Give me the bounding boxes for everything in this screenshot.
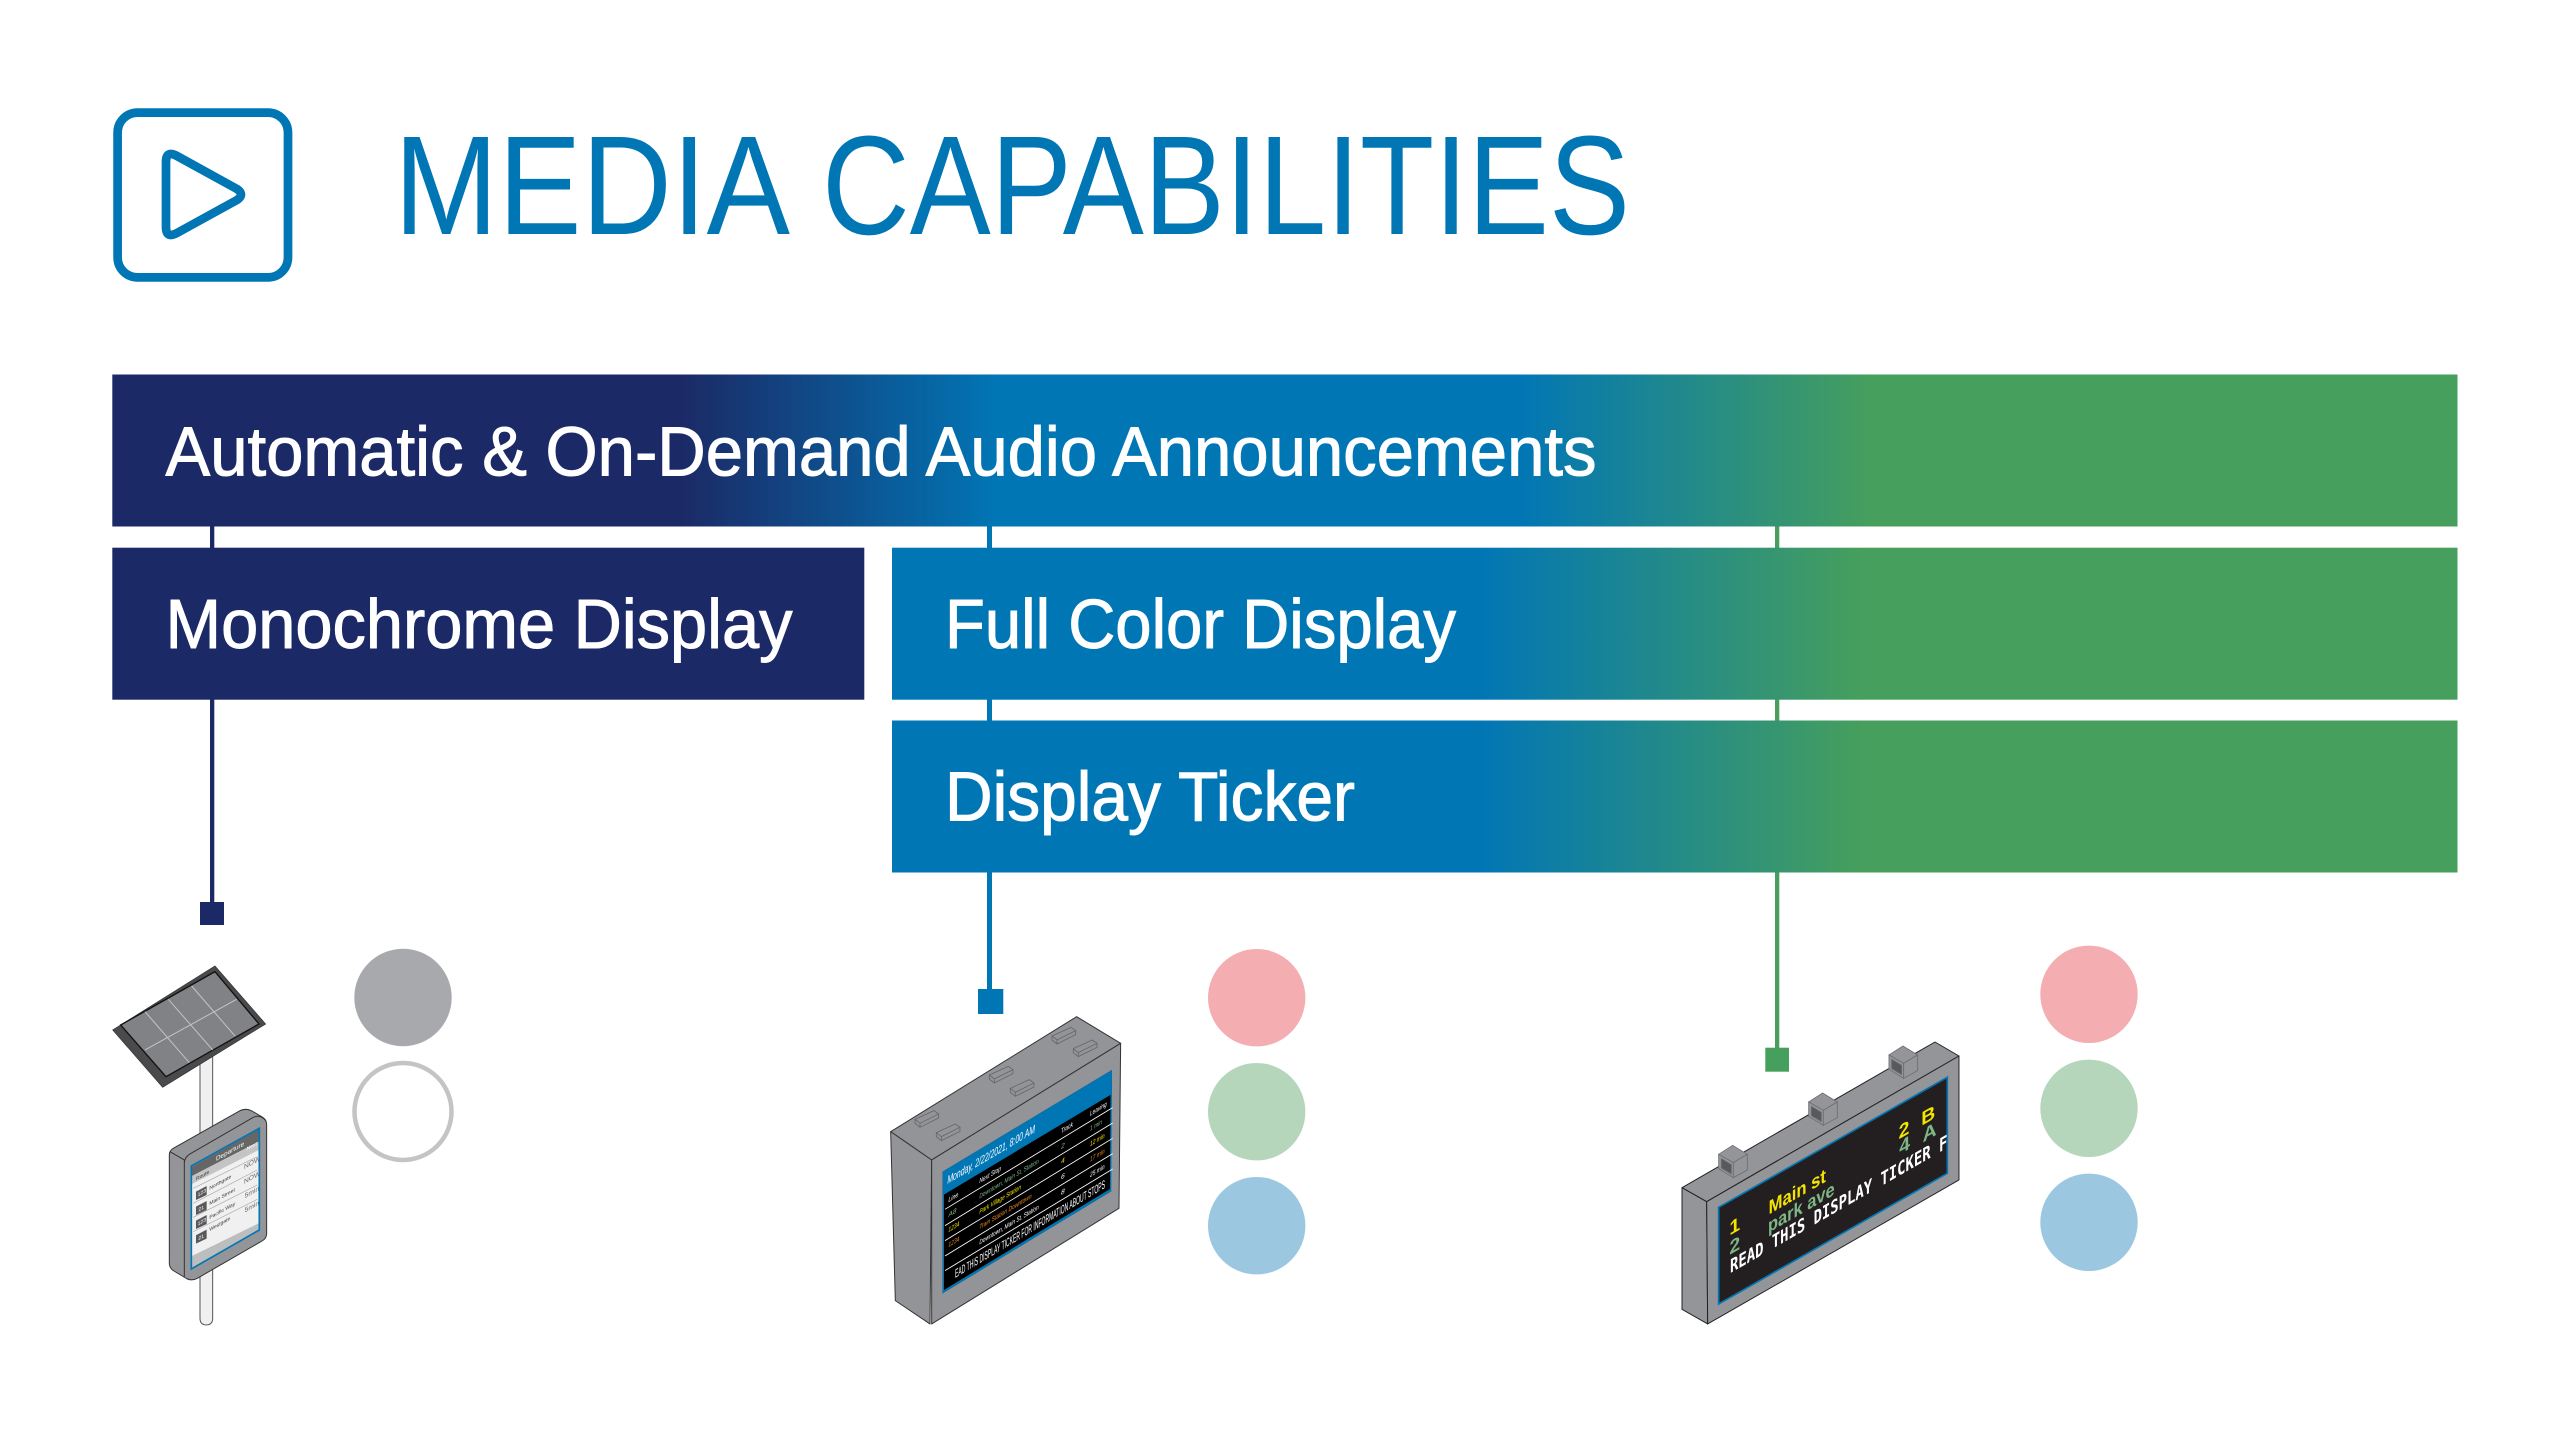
sign screen: 21 (198, 1205, 204, 1213)
marker: monochrome (200, 902, 224, 925)
sign screen: 5min (245, 1199, 259, 1214)
sign screen: Route (196, 1170, 209, 1182)
bar: monochrome display: Monochrome Display (166, 585, 792, 663)
sign screen: Westgate (209, 1216, 230, 1233)
legend: full color blue dot (1208, 1177, 1305, 1274)
sign screen: 123 (198, 1188, 206, 1198)
ticker screen: A (1923, 1118, 1937, 1147)
ticker screen: 2 (1729, 1232, 1740, 1260)
ticker screen (1719, 1077, 1947, 1304)
sign screen: NOW (244, 1169, 260, 1186)
ticker screen: 1 (1729, 1213, 1740, 1240)
housing (1682, 1042, 1959, 1324)
ticker screen: 4 (1899, 1132, 1910, 1159)
sign screen: NOW (244, 1155, 260, 1171)
bar: display ticker (892, 720, 2458, 872)
mounting cubes (1719, 1046, 1918, 1178)
sign screen: Departure (216, 1141, 244, 1163)
screen: 1234 (948, 1219, 959, 1234)
title: CAPABILITIES (822, 106, 1630, 264)
title (394, 106, 1630, 264)
sign screen: Main Street (209, 1187, 235, 1207)
bar: full color display (892, 548, 2458, 700)
screen: Leaving (1090, 1100, 1107, 1118)
sign screen: 5min (245, 1185, 259, 1200)
screen: 1234 (948, 1234, 959, 1249)
ticker screen: B (1921, 1101, 1935, 1131)
ticker screen: 2 (1899, 1116, 1909, 1144)
screen (943, 1070, 1113, 1293)
screen: Park Village Station (979, 1182, 1021, 1216)
screen: 8 (1061, 1186, 1065, 1197)
screen: Next Stop (979, 1164, 1001, 1185)
sign screen: Pacific Way (209, 1201, 235, 1221)
screen: 17 min (1090, 1146, 1105, 1163)
bar: audio announcements: Automatic & On-Demand Audio Announcements (166, 412, 1596, 490)
screen: 2 (1060, 1140, 1065, 1151)
legend: monochrome empty dot (354, 1063, 452, 1160)
bar: audio announcements (112, 374, 2457, 526)
ticker screen: Main st (1769, 1165, 1826, 1219)
legend: ticker red dot (2040, 946, 2138, 1043)
bar: display ticker: Display Ticker (945, 758, 1355, 836)
legend: ticker blue dot (2040, 1174, 2138, 1271)
sign screen: Next (247, 1141, 257, 1153)
screen: 6 (1061, 1170, 1066, 1181)
title: MEDIA (394, 106, 790, 264)
device: solar powered monochrome sign (113, 966, 267, 1325)
screen: Downtown, Main St. Station (979, 1157, 1039, 1200)
connector lines (210, 526, 1779, 1049)
sign screen: Northgate (209, 1174, 231, 1192)
marker: full color (978, 989, 1003, 1014)
device: display ticker (1682, 1042, 1959, 1324)
bar: monochrome display (112, 548, 864, 700)
solar panel (113, 966, 266, 1087)
screen: 4 (1061, 1155, 1065, 1166)
sign screen (191, 1128, 260, 1269)
pole (200, 1057, 213, 1325)
screen: 1 min (1090, 1117, 1102, 1133)
sign screen: 123 (198, 1217, 206, 1227)
marker: ticker (1765, 1048, 1789, 1072)
screen: Downtown, Main St. Station (979, 1203, 1039, 1246)
screen: Train Station Downtown (979, 1191, 1032, 1231)
screen: 12 min (1090, 1131, 1105, 1148)
sign screen: 21 (198, 1233, 204, 1242)
bar: full color display: Full Color Display (945, 585, 1456, 663)
screen: A8 (947, 1206, 956, 1220)
screen: 25 min (1089, 1162, 1105, 1180)
housing (891, 1017, 1121, 1324)
ticker screen: READ THIS DISPLAY TICKER F (1730, 1130, 1947, 1278)
ticker screen: park ave (1768, 1178, 1835, 1238)
sign housing (169, 1109, 267, 1280)
text: EAD THIS DISPLAY TICKER FOR INFORMATION ABOUT STOPS (955, 1177, 1105, 1281)
legend: ticker green dot (2040, 1060, 2138, 1157)
icon: play button (118, 113, 288, 277)
mounting nubs (915, 1027, 1097, 1141)
device: full color display (891, 1017, 1121, 1324)
screen: Track (1061, 1120, 1073, 1135)
screen: Monday, 2/22/2021, 8:00 AM (947, 1122, 1035, 1187)
legend: full color red dot (1208, 949, 1305, 1046)
legend: full color green dot (1208, 1063, 1305, 1160)
screen: Line (948, 1190, 958, 1204)
legend: monochrome filled dot (354, 949, 452, 1046)
